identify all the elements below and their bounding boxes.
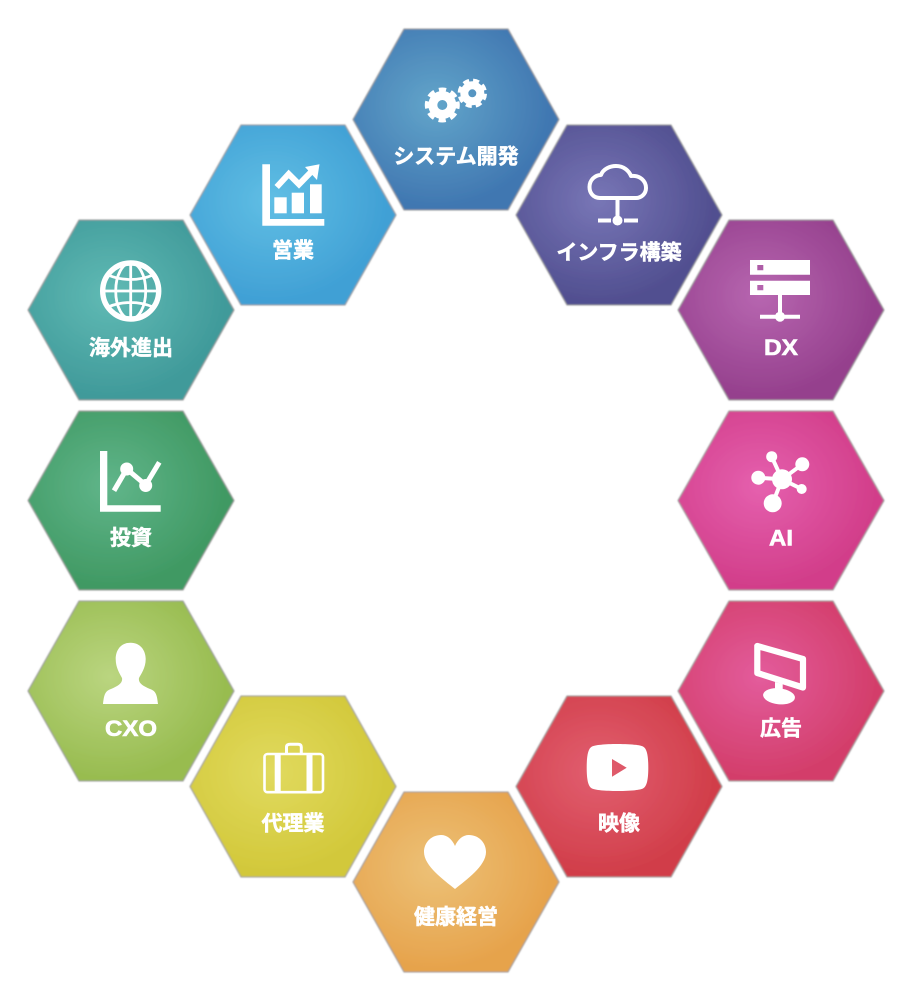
label: 代理業: 代理業 (262, 812, 324, 836)
hexagon: 広告 (678, 601, 884, 781)
label: CXO: CXO (105, 716, 157, 741)
label: AI: AI (769, 526, 793, 550)
icon: bar chart with arrow (262, 164, 324, 226)
panel: 広告 (678, 601, 884, 781)
icon: cloud network (590, 166, 646, 226)
hexagon: 営業 (190, 125, 396, 305)
label: 映像: 映像 (598, 812, 640, 836)
hexagon: 海外進出 (28, 220, 234, 400)
panel: 代理業 (190, 696, 396, 877)
hexagon: 健康経営 (353, 792, 559, 972)
hexagon: 代理業 (190, 696, 396, 877)
label: 営業: 営業 (272, 240, 314, 262)
icon: video play (587, 744, 648, 791)
panel: 海外進出 (28, 220, 234, 400)
label: 投資: 投資 (110, 527, 152, 550)
icon: server (750, 260, 810, 322)
hexagon: 映像 (516, 696, 722, 877)
panel: インフラ構築 (516, 125, 722, 305)
panel: CXO (28, 601, 234, 781)
hexagon: 投資 (28, 411, 234, 590)
panel: 健康経営 (353, 792, 559, 972)
hexagon: システム開発 (353, 29, 559, 210)
panel: AI (678, 411, 884, 590)
icon: line chart (100, 451, 161, 512)
panel: 投資 (28, 411, 234, 590)
icon: network nodes (751, 451, 809, 512)
hexagon: CXO (28, 601, 234, 781)
panel: システム開発 (353, 29, 559, 210)
panel: DX (678, 220, 884, 400)
icon: globe (103, 263, 159, 319)
label: システム開発: システム開発 (393, 146, 519, 168)
icon: monitor (757, 646, 803, 706)
panel: 営業 (190, 125, 396, 305)
label: インフラ構築: インフラ構築 (556, 242, 682, 264)
panel: 映像 (516, 696, 722, 877)
icon: heart (424, 835, 486, 889)
label: DX: DX (764, 335, 798, 360)
icon: gears (424, 80, 485, 123)
icon: suitcase (264, 744, 323, 792)
hexagon: DX (678, 220, 884, 400)
icon: person (103, 643, 158, 704)
label: 広告: 広告 (760, 718, 802, 740)
hexagon: インフラ構築 (516, 125, 722, 305)
label: 海外進出: 海外進出 (89, 337, 173, 360)
hexagon: AI (678, 411, 884, 590)
label: 健康経営: 健康経営 (414, 906, 498, 929)
